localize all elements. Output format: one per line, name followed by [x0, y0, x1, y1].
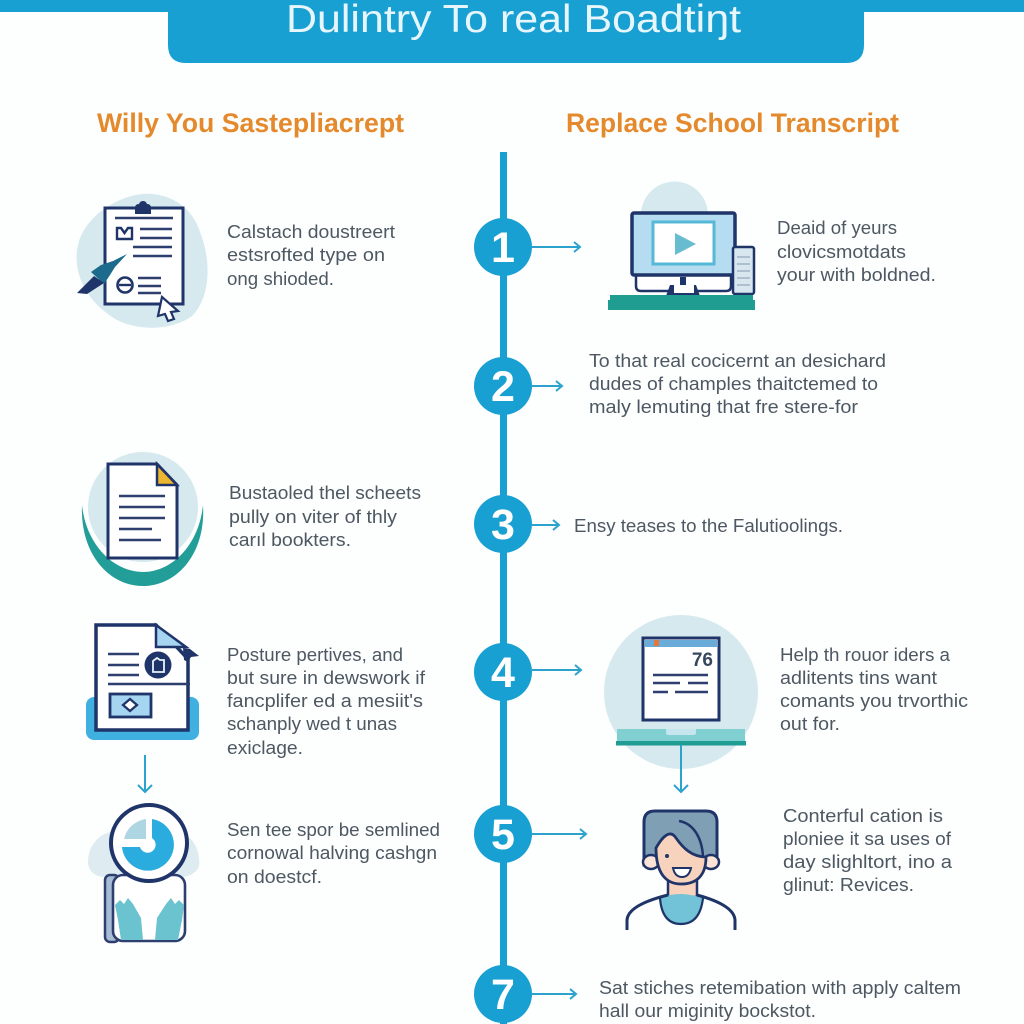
text: left block 3: Posture pertives, and — [227, 645, 403, 665]
text: right block 4: comants you trvorthic — [780, 691, 968, 711]
title banner — [0, 0, 1024, 63]
step 5 marker — [474, 805, 586, 863]
text: left block 1: ong shioded. — [227, 269, 334, 289]
arrow: down left — [138, 755, 152, 792]
text: right block 5: day slighltort, ino a — [783, 852, 953, 872]
text: right block 7: hall our miginity bockstot. — [599, 1001, 816, 1021]
step 3 marker: 3 — [491, 501, 515, 549]
step 2 marker: 2 — [491, 363, 515, 411]
text: left block 3 — [227, 645, 426, 758]
text: right block 5 — [783, 806, 953, 895]
icon: clock head with hands — [88, 805, 199, 942]
arrow: down right — [674, 745, 688, 792]
step 4 marker: 4 — [491, 649, 515, 697]
text: right block 3: Ensy teases to the Falutioolings. — [574, 516, 843, 536]
text: left block 4 — [227, 820, 440, 887]
text: right block 2: To that real cocicernt an desichard — [589, 351, 886, 371]
timeline spine — [500, 152, 507, 1024]
step 1 marker — [474, 218, 580, 276]
step 2 marker — [474, 357, 562, 415]
text: right block 1: your with boldned. — [777, 265, 936, 285]
step 4 marker — [474, 643, 581, 701]
text: left block 3: schanply wed t unas — [227, 714, 397, 734]
icon: person avatar — [627, 811, 735, 930]
text: right block 1 — [777, 218, 936, 285]
text: right block 1: Deaid of yeurs — [777, 218, 897, 238]
text: right block 4: Help th rouor iders a — [780, 645, 951, 665]
icon: document with teal arc — [82, 452, 203, 586]
heading: right column: Replace School Transcript — [566, 108, 899, 138]
heading: left column: Willy You Sastepliacrept — [97, 108, 404, 138]
text: right block 7 — [599, 978, 961, 1021]
step 5 marker: 5 — [491, 811, 515, 859]
icon: browser window with score on a shelf: 76 — [692, 650, 713, 671]
icon: clipboard with pen and cursor — [77, 194, 208, 328]
text: right block 5: glinut: Revices. — [783, 875, 914, 895]
step 7 marker — [474, 965, 576, 1023]
text: left block 3: exiclage. — [227, 738, 303, 758]
step 7 marker: 7 — [491, 971, 515, 1019]
text: right block 5: Conterful cation is — [783, 806, 943, 826]
text: left block 4: cornowal halving cashgn — [227, 843, 437, 863]
text: left block 4: Sen tee spor be semlined — [227, 820, 440, 840]
text: right block 4: out for. — [780, 714, 840, 734]
icon: paper with badge on blue base — [86, 625, 199, 740]
text: right block 5: ploniee it sa uses of — [783, 829, 952, 849]
text: left block 4: on doestcf. — [227, 867, 322, 887]
step 1 marker: 1 — [491, 224, 515, 272]
text: left block 2 — [229, 483, 421, 550]
text: right block 2: dudes of champles thaitctemed to — [589, 374, 878, 394]
text: left block 1 — [227, 222, 395, 289]
text: right block 4: adlitents tins want — [780, 668, 937, 688]
text: right block 7: Sat stiches retemibation with apply caltem — [599, 978, 961, 998]
step 3 marker — [474, 495, 559, 553]
text: right block 2: maly lemuting that fre stere-for — [589, 397, 858, 417]
text: left block 2: Bustaoled thel scheets — [229, 483, 421, 503]
text: right block 1: clovicsmotdats — [777, 242, 906, 262]
text: left block 2: pully on viter of thly — [229, 507, 397, 527]
text: left block 3: fancplifer ed a mesiit's — [227, 691, 423, 711]
icon: browser window with score on a shelf — [604, 615, 758, 769]
text: right block 2 — [589, 351, 886, 417]
text: left block 2: carıl bookters. — [229, 530, 351, 550]
text: left block 1: estsrofted type on — [227, 245, 385, 265]
text: left block 3: but sure in dewswork if — [227, 668, 426, 688]
text: left block 1: Calstach doustreert — [227, 222, 395, 242]
icon: monitor with play button and phone — [608, 182, 755, 310]
text: right block 4 — [780, 645, 968, 734]
